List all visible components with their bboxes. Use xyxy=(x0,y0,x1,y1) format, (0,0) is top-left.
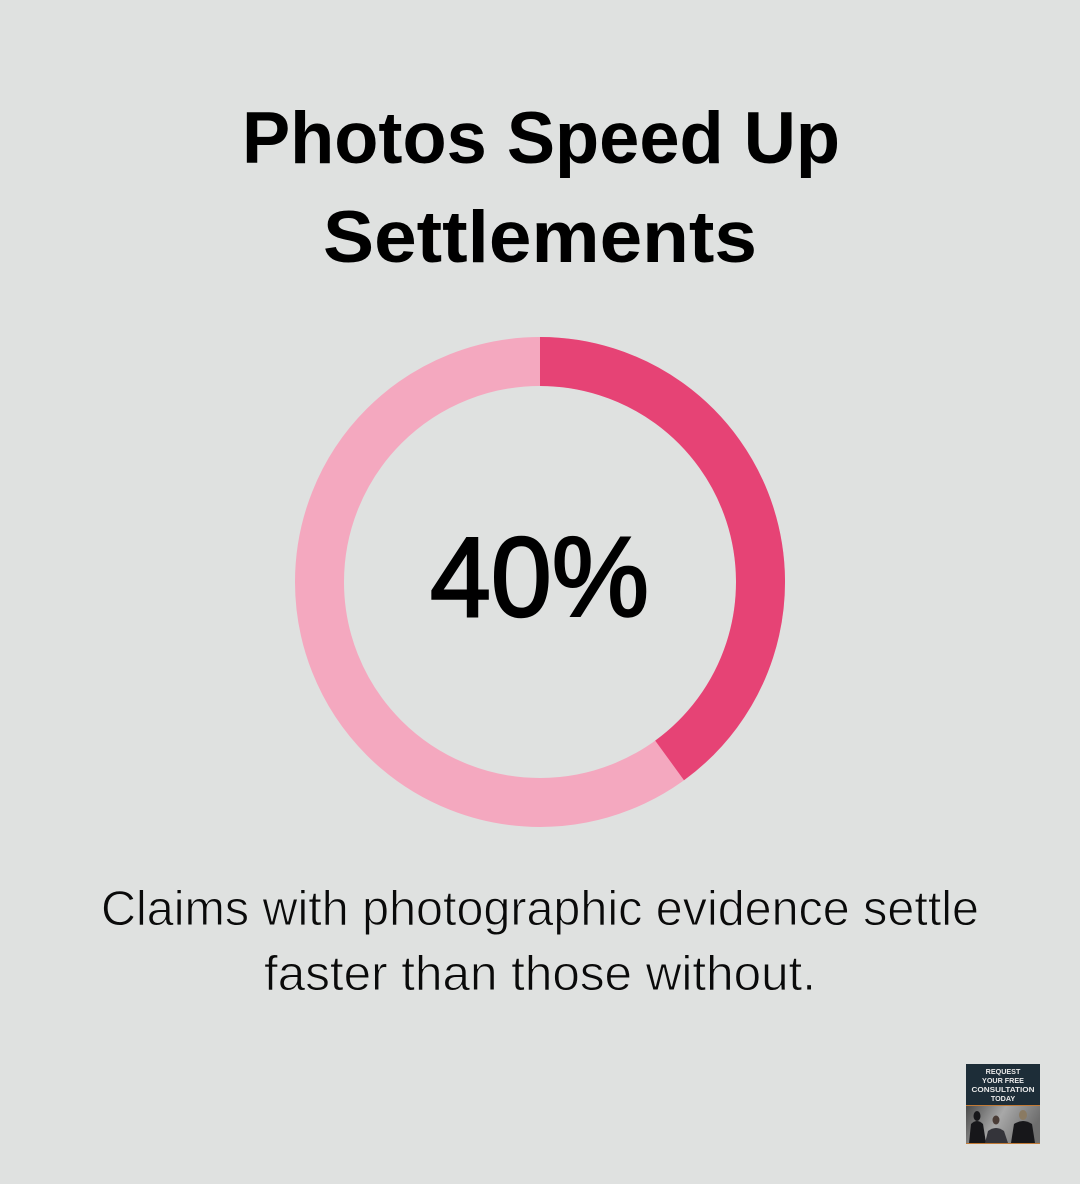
badge text: REQUEST xyxy=(986,1067,1021,1076)
badge text: YOUR FREE xyxy=(982,1076,1024,1085)
badge text: CONSULTATION xyxy=(972,1085,1034,1094)
badge text: TODAY xyxy=(991,1094,1015,1103)
donut chart: 40% xyxy=(320,362,761,802)
badge text xyxy=(972,1067,1034,1103)
title: Settlements xyxy=(323,197,757,278)
consultation badge xyxy=(966,1064,1040,1144)
title: Photos Speed Up xyxy=(242,98,840,179)
description: faster than those without. xyxy=(264,947,816,1001)
description: Claims with photographic evidence settle xyxy=(101,882,979,936)
title xyxy=(242,98,840,278)
badge photo: three people xyxy=(969,1110,1035,1143)
description xyxy=(101,882,979,1001)
donut value: 40% xyxy=(430,514,649,640)
